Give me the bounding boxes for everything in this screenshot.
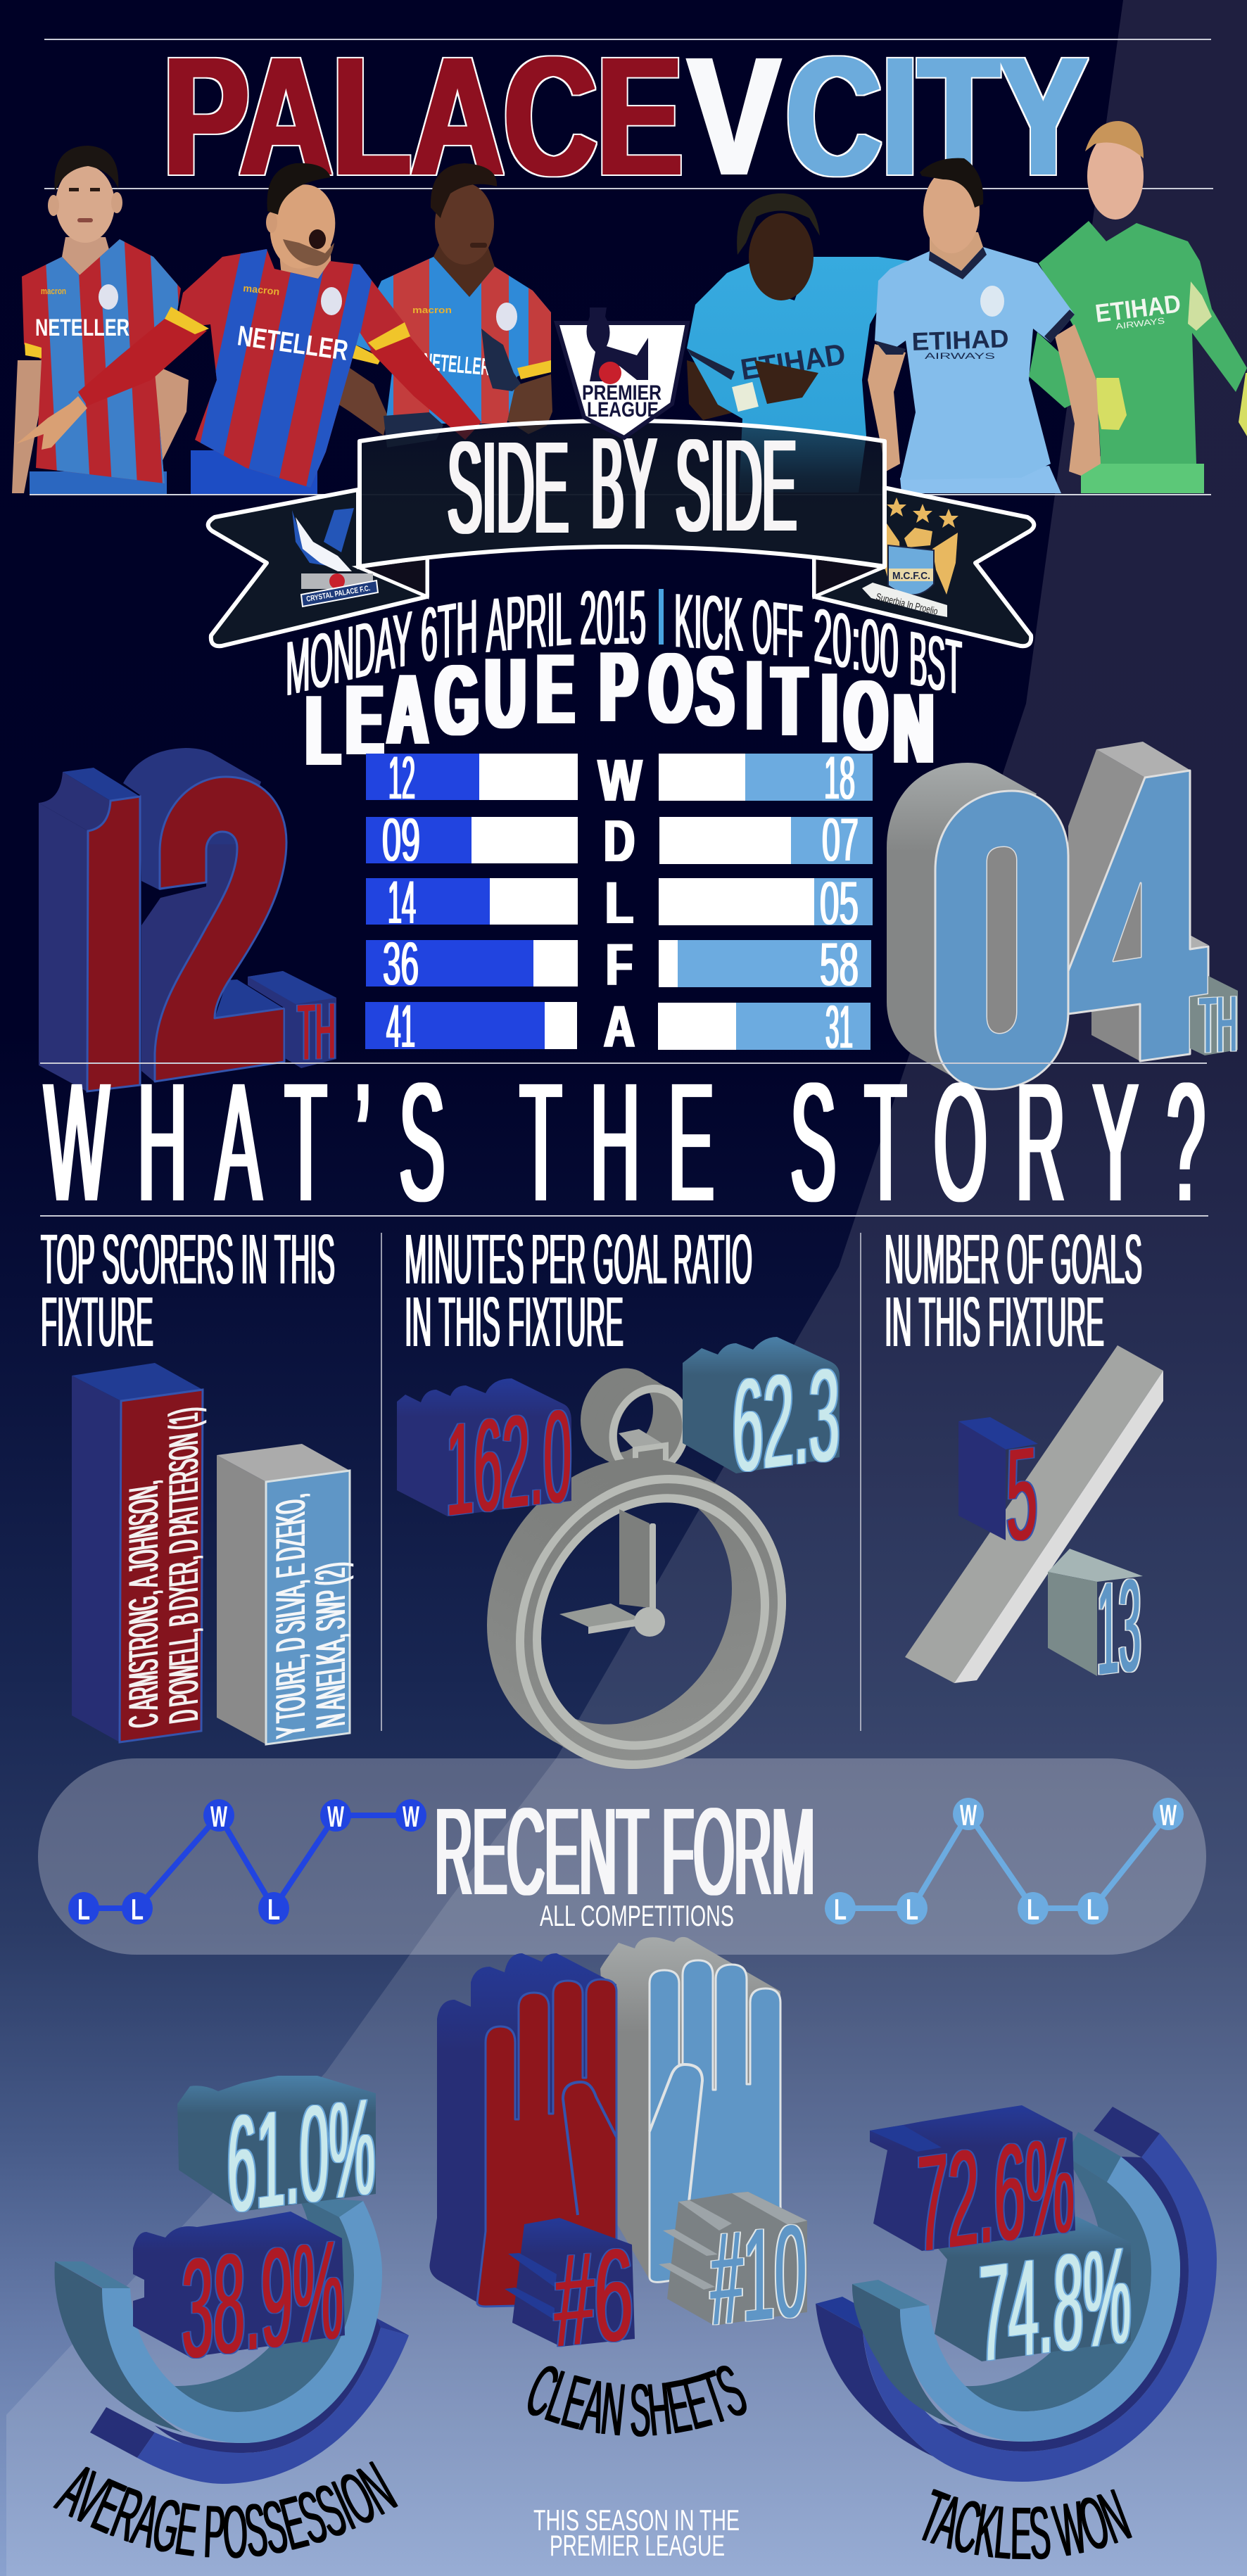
stat: City 13 goals [1048,1549,1143,1703]
ball [599,362,621,384]
league table bars [365,744,873,1061]
palace scorer column [72,1363,207,1742]
row letters: W [598,747,643,813]
date words: OFF [752,583,803,675]
icon: Manchester City crest: Superbia In Proelio [875,590,939,617]
text: TH [298,986,336,1077]
player 5 [868,158,1101,493]
row letters: F [606,932,633,998]
row letters: L [605,870,633,936]
bar values: 09 [382,806,420,874]
column headings: FIXTURE [41,1283,153,1362]
palace ring [863,2133,1217,2482]
form pill background [38,1758,1206,1955]
digit 2 face [155,777,286,1081]
bar values: 07 [822,806,859,874]
stopwatch hands [559,1509,665,1637]
right ribbon tail [814,488,1034,646]
palace form line: W [210,1800,227,1833]
palace scorer names: C ARMSTRONG, A JOHNSON, [120,1478,167,1731]
palace ring end caps [1094,2107,1160,2157]
palace ring [137,2328,409,2484]
player 6: AIRWAYS [1115,316,1165,331]
city scorer column [217,1444,354,1744]
text: BST [909,615,962,711]
stopwatch body [487,1458,786,1769]
bar values: 05 [820,870,859,937]
date words: APRIL [486,576,571,669]
palace form line: L [77,1893,90,1926]
row letters: D [604,808,635,874]
left ribbon tail [208,490,427,646]
city ring [102,2201,382,2443]
stat: City #10 clean sheets [659,2192,807,2353]
ribbon banner: SIDE [676,413,797,559]
stat: City 74.8% [932,2216,1131,2391]
right bars: City [658,754,873,1050]
city form line: L [1087,1893,1099,1926]
ribbon banner [208,411,1034,646]
title word Palace: PALACE [163,22,683,210]
bar values: 36 [383,930,419,998]
stat: Palace 72.6% [870,2105,1075,2281]
player 1 [12,146,190,509]
city form line: L [1027,1893,1039,1926]
player 6: ETIHAD [1094,288,1182,328]
league table bars: 31 [825,994,853,1061]
extrusion of digit 2 [123,748,261,890]
centre panel of ribbon [360,421,885,566]
icon: City goalkeeper glove [600,1937,783,2282]
label: tackles won: TACKLES WON [922,2489,1132,2560]
player 6 [1029,121,1247,493]
column headings [41,1220,1142,1362]
all competitions note: ALL COMPETITIONS [540,1899,734,1932]
label: clean sheets: CLEAN SHEETS [528,2366,747,2437]
footer note [533,2504,740,2562]
date words: MONDAY [286,595,412,713]
icon: Palace goalkeeper glove [429,1953,616,2307]
th suffix extrusion [1190,976,1238,1055]
player 1: NETELLER [35,315,129,341]
extrusion of digit 4 [1068,749,1145,971]
icon: Manchester City crest: M.C.F.C. [892,570,930,582]
palace form line: W [403,1800,419,1833]
banner heading: Side by Side: BY [591,411,657,557]
icon: percent slash [905,1345,1163,1683]
badge: Premier League [557,307,688,438]
city scorer names [267,1492,354,1741]
bar values: 12 [388,744,415,812]
panel: recent form [38,1758,1206,1955]
city form line [825,1798,1184,1926]
icon: Crystal Palace crest: CRYSTAL PALACE F.C. [305,584,371,604]
city ring inner wall [160,2192,354,2412]
text: #10 [711,2196,806,2353]
bar values: 18 [824,744,855,812]
palace form line: L [267,1893,280,1926]
player 1: macron [41,286,66,296]
digit 1 face [87,797,140,1091]
extrusion of digit 1 [39,803,88,1092]
player 5: AIRWAYS [925,351,995,361]
title word v: V [688,22,780,210]
stat: Palace 5 goals [958,1417,1038,1569]
player 4: ETIHAD [738,337,848,386]
row letters [598,747,643,1060]
label: average possession: AVERAGE POSSESSION [53,2461,398,2558]
bar values: 58 [820,931,859,998]
left bars: Palace [365,754,578,1049]
date words: 2015 [580,574,646,661]
column headings: TOP SCORERS IN THIS [41,1220,335,1299]
player 2: NETELLER [236,320,350,367]
date words: KICK [674,578,743,668]
stat: City 61.0% [177,2070,376,2242]
palace scorer names [120,1405,207,1731]
player 5: ETIHAD [911,324,1009,356]
digit 4 face [1068,770,1208,1061]
city ring sides [957,2156,1151,2411]
bar values: 14 [388,869,416,937]
footer note: PREMIER LEAGUE [550,2529,725,2562]
panel: top scorers [72,1363,354,1744]
player 4 [687,193,910,493]
chart: average possession [55,2070,409,2484]
big 3D number: City 4th [887,742,1238,1089]
text: 5 [1006,1419,1037,1569]
badge wording: PREMIER [582,381,662,405]
title: Palace v City [163,22,1087,210]
text: 61.0% [227,2070,375,2242]
palace form line [68,1799,426,1926]
text: 62.3 [733,1340,840,1500]
stat: Palace 162.0 minutes per goal [397,1378,571,1544]
match date and kick-off line [286,574,962,713]
heading: League Position: LEAGUE POSITION [306,631,933,787]
player 3 [338,163,556,448]
lion emblem [587,307,648,381]
city ring [900,2157,1180,2442]
player 2: macron [243,282,280,297]
row letters: A [604,994,635,1060]
Manchester City players [687,121,1247,493]
column headings: IN THIS FIXTURE [405,1283,624,1362]
extrusion of digit 0 [887,763,1037,1081]
th suffix extrusion [248,971,336,1068]
player 3: macron [412,305,452,315]
date words [286,574,962,713]
badge wording: LEAGUE [587,398,659,421]
digit 0 face [935,791,1068,1089]
stopwatch crown [581,1368,686,1464]
palace form line: L [131,1893,144,1926]
date words: 20:00 [814,592,899,695]
city scorer names: N ANELKA, SWP (2) [307,1560,354,1731]
city form line: L [906,1893,918,1926]
footer note: THIS SEASON IN THE [533,2504,740,2537]
big 3D number: Palace 12th [39,748,336,1092]
city form line: L [834,1893,847,1926]
ring separator [939,2157,1189,2451]
stat: City 62.3 minutes per goal [683,1337,840,1500]
chart: tackles won [816,2105,1217,2482]
chart: average possession: 38.9% [182,2209,343,2389]
city ring outer side [55,2261,183,2432]
text: 162.0 [446,1381,571,1544]
icon: Crystal Palace crest [292,508,378,607]
city form line: W [1160,1798,1177,1832]
player 3: NETELLER [422,348,491,381]
Crystal Palace players [12,146,552,494]
stat: Palace #6 clean sheets [505,2218,635,2375]
bar values: 41 [386,993,415,1060]
title word City: CITY [786,22,1087,210]
banner heading: Side by Side: SIDE [448,415,569,561]
text: D POWELL, B DYER, D PATTERSON (1) [160,1405,207,1726]
icon: stopwatch [487,1362,786,1788]
city scorer column: Y TOURE, D SILVA, E DZEKO, [267,1492,314,1741]
stat: Palace 38.9% [133,2209,345,2389]
text: 13 [1097,1551,1141,1703]
stat: Palace #6 clean sheets: #6 [555,2220,633,2375]
city form line: W [960,1798,977,1832]
date words: 6TH [421,583,478,679]
bar values [382,744,859,1061]
palace form line: W [327,1800,344,1833]
palace ring end cap [90,2407,155,2458]
badge wording [582,381,662,421]
icon: Manchester City crest [862,497,958,617]
player 2 [16,163,481,532]
divider bar [659,589,664,645]
